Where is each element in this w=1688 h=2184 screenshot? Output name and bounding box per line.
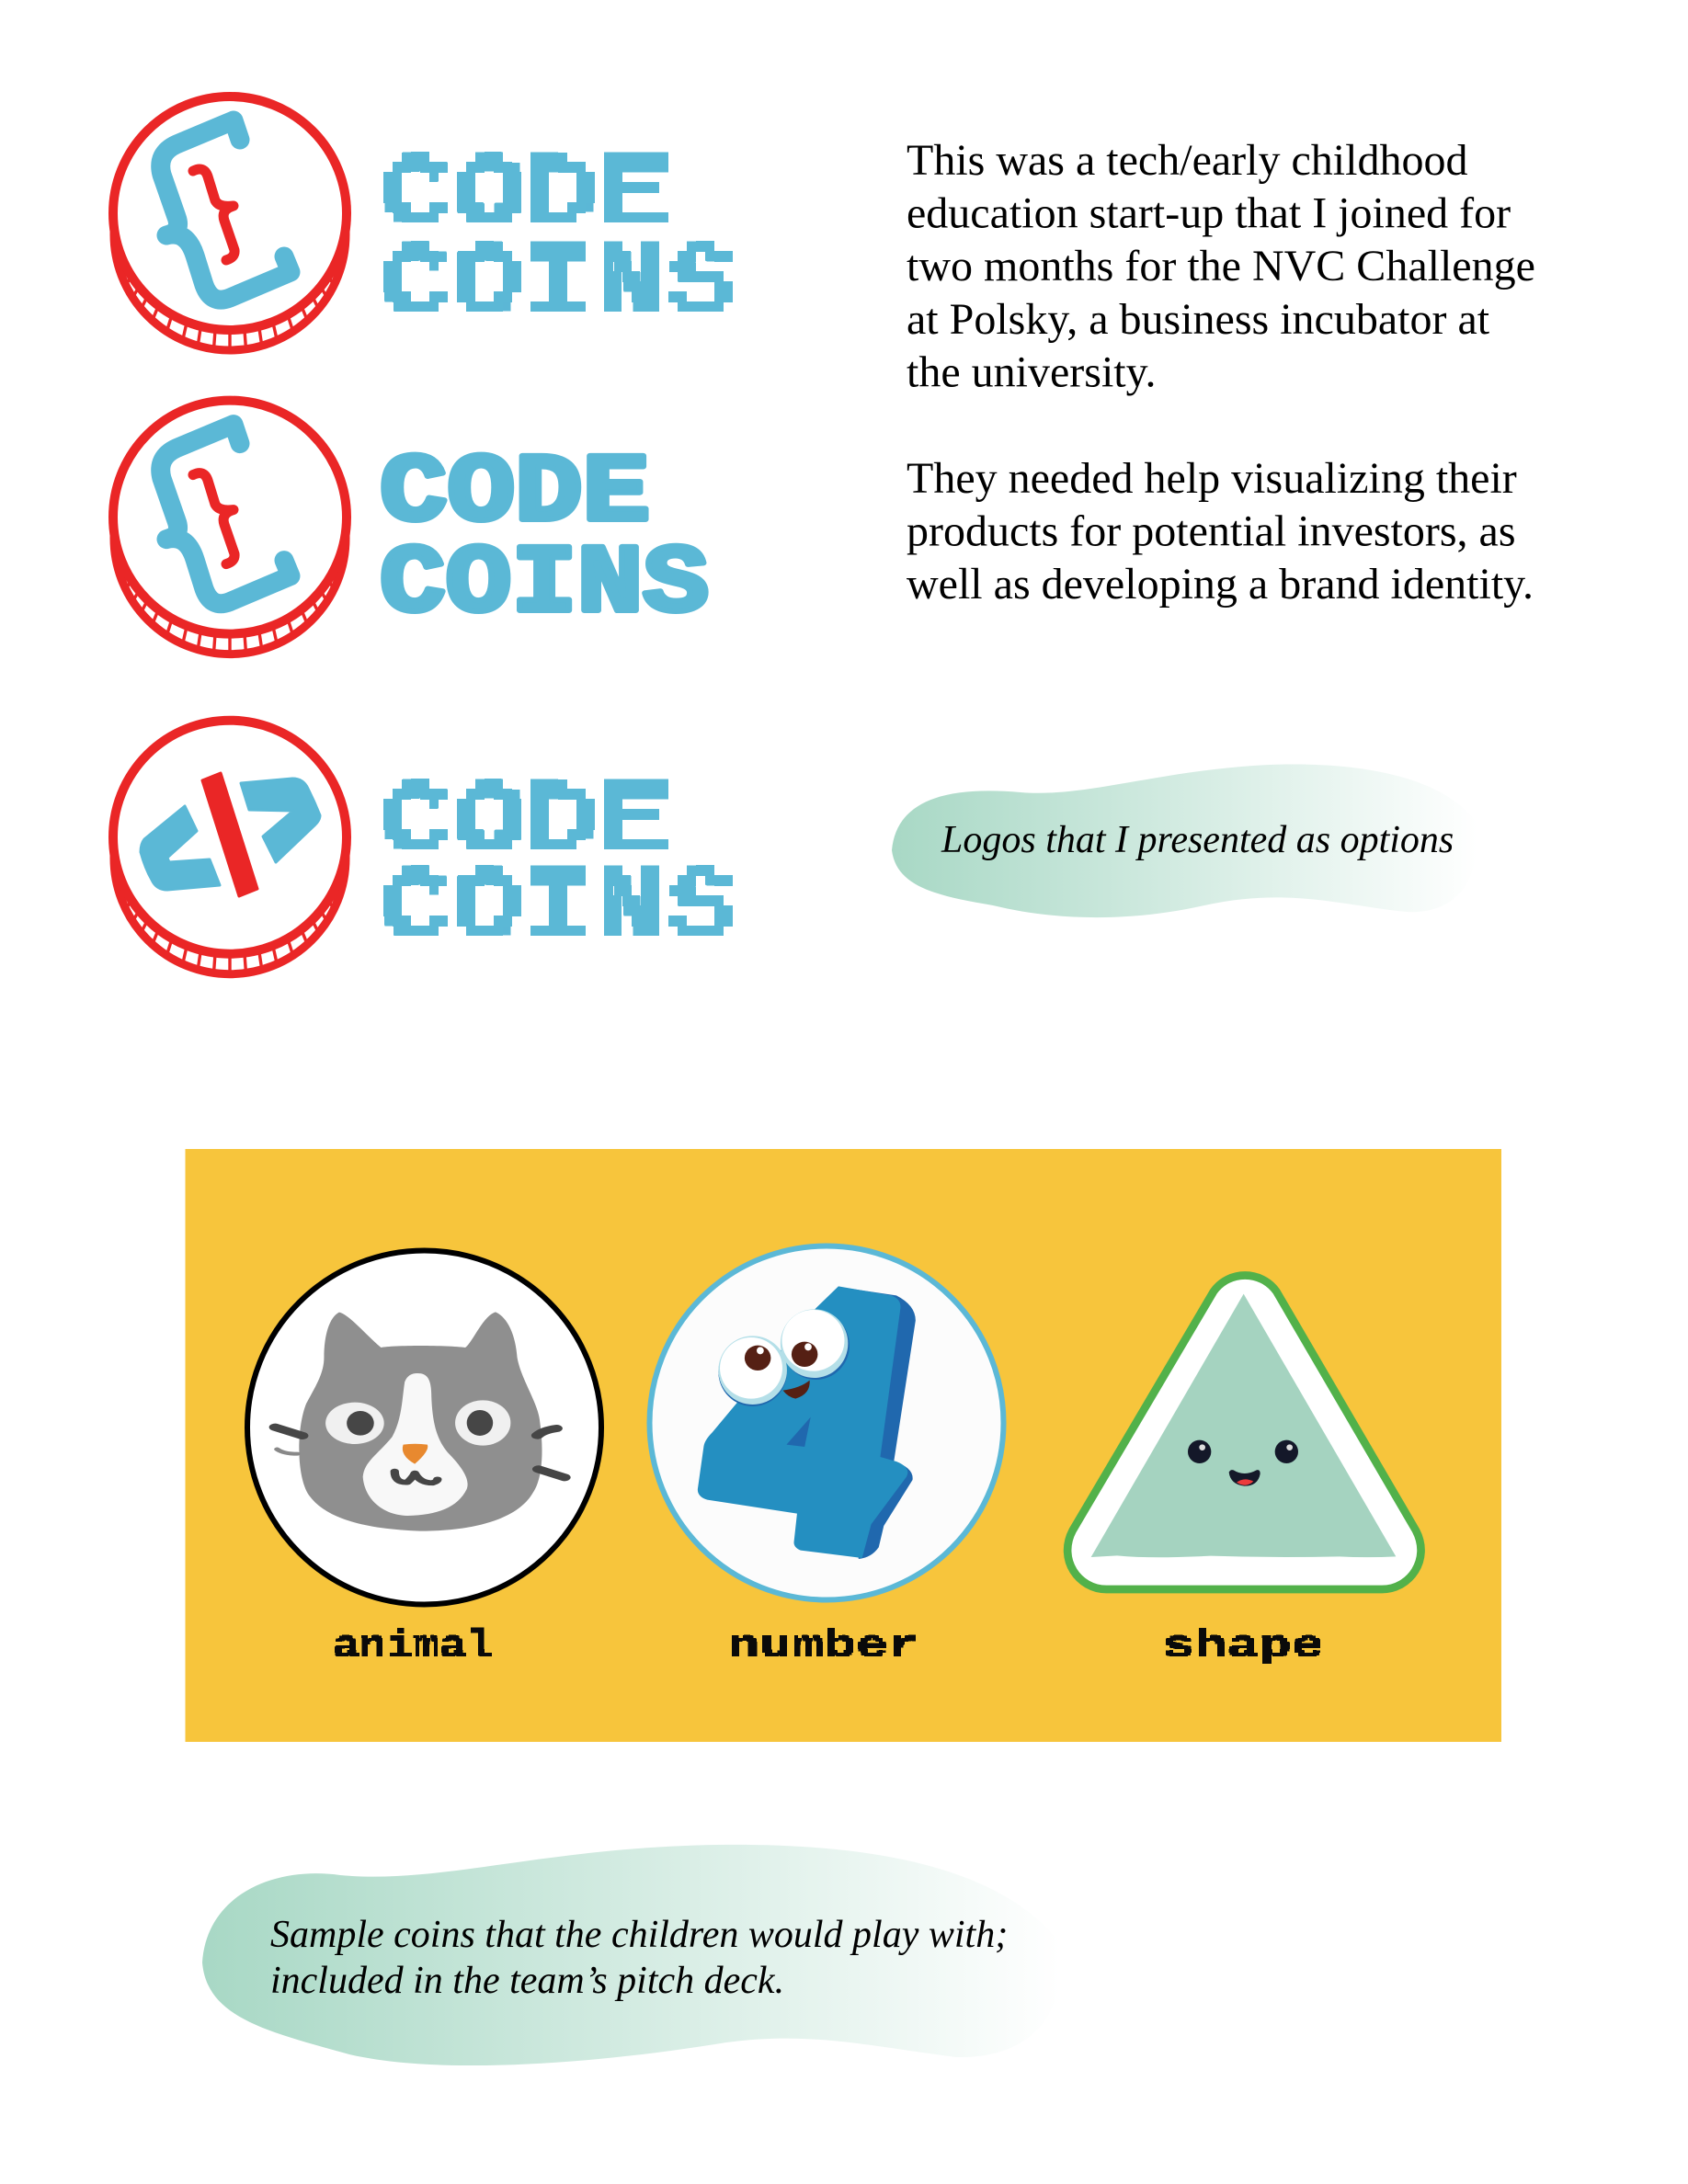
callout: logos caption — [892, 764, 1477, 917]
text block: project description: This was a tech/early childhood — [907, 136, 1467, 185]
text block: project description: They needed help visualizing their — [907, 454, 1517, 503]
text block: project description — [907, 136, 1535, 609]
text block: project description: at Polsky, a business incubator at — [907, 295, 1490, 344]
labels: coin category names: animal — [333, 1624, 493, 1668]
text block: project description: well as developing a brand identity. — [907, 560, 1534, 609]
coin: number four — [649, 1246, 1004, 1599]
icon: coin with code tag — [113, 721, 347, 974]
text block: project description: products for potential investors, as — [907, 507, 1516, 556]
wordmark: pixel Code Coins, third option — [380, 768, 738, 965]
panel: sample coins on yellow background — [186, 1149, 1501, 1742]
text block: project description: the university. — [907, 347, 1157, 396]
labels: coin category names: shape — [1162, 1624, 1324, 1668]
callout: sample coins caption: included in the team’s pitch deck. — [270, 1960, 784, 2002]
wordmark: pixel Code Coins: CODE — [380, 141, 672, 252]
text block: project description: two months for the NVC Challenge — [907, 242, 1535, 290]
wordmark: bold Code Coins — [380, 439, 709, 640]
labels: coin category names — [333, 1624, 1324, 1668]
wordmark: bold Code Coins: COINS — [380, 530, 709, 640]
logo option 2: curly brace coin with bold wordmark — [113, 401, 709, 654]
logo option 1: curly brace coin with pixel wordmark — [113, 97, 738, 350]
coin: animal cat — [247, 1250, 601, 1605]
icon: coin with curly braces, bold version — [113, 401, 347, 654]
wordmark: pixel Code Coins, third option: COINS — [380, 854, 738, 965]
wordmark: pixel Code Coins, third option: CODE — [380, 768, 672, 879]
logo option 3: code tag coin with pixel wordmark — [113, 721, 738, 974]
labels: coin category names: number — [727, 1624, 920, 1668]
coin: shape triangle — [1067, 1275, 1421, 1589]
wordmark: pixel Code Coins: COINS — [380, 230, 738, 341]
callout: sample coins caption — [202, 1845, 1060, 2065]
wordmark: bold Code Coins: CODE — [380, 439, 650, 549]
wordmark: pixel Code Coins — [380, 141, 738, 341]
callout: sample coins caption: Sample coins that the children would play with; — [270, 1914, 1008, 1956]
callout: logos caption: Logos that I presented as options — [941, 819, 1454, 861]
text block: project description: education start-up that I joined for — [907, 189, 1511, 238]
icon: coin with curly braces — [113, 97, 347, 350]
